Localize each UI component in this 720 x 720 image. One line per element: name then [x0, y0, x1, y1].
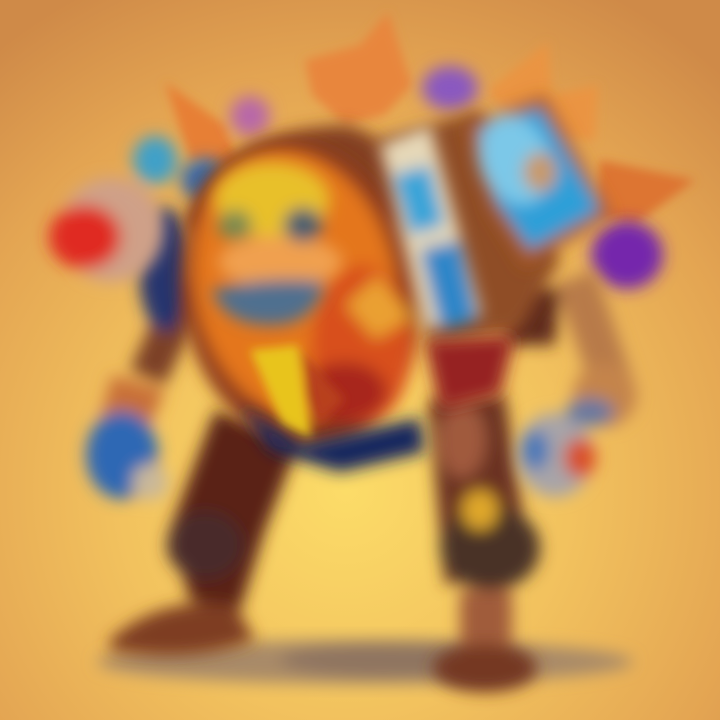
- ground shadow: [97, 640, 633, 684]
- left arm and hand: [86, 208, 210, 500]
- yellow belly wedge: [250, 345, 345, 440]
- navy belt: [240, 405, 425, 472]
- brown backing behind column and shield: [375, 110, 560, 345]
- face: [212, 162, 342, 325]
- legs and feet: [110, 395, 540, 692]
- round body: [152, 119, 448, 471]
- purple accents: [230, 66, 663, 289]
- red ball and teal shapes: [49, 136, 229, 282]
- red sash: [425, 335, 515, 410]
- blue shield panel: [465, 95, 612, 268]
- brown hat band: [185, 125, 420, 250]
- right arm and hand: [505, 270, 637, 497]
- blue and white pencil column: [380, 125, 482, 330]
- orange spikes on top: [165, 12, 695, 225]
